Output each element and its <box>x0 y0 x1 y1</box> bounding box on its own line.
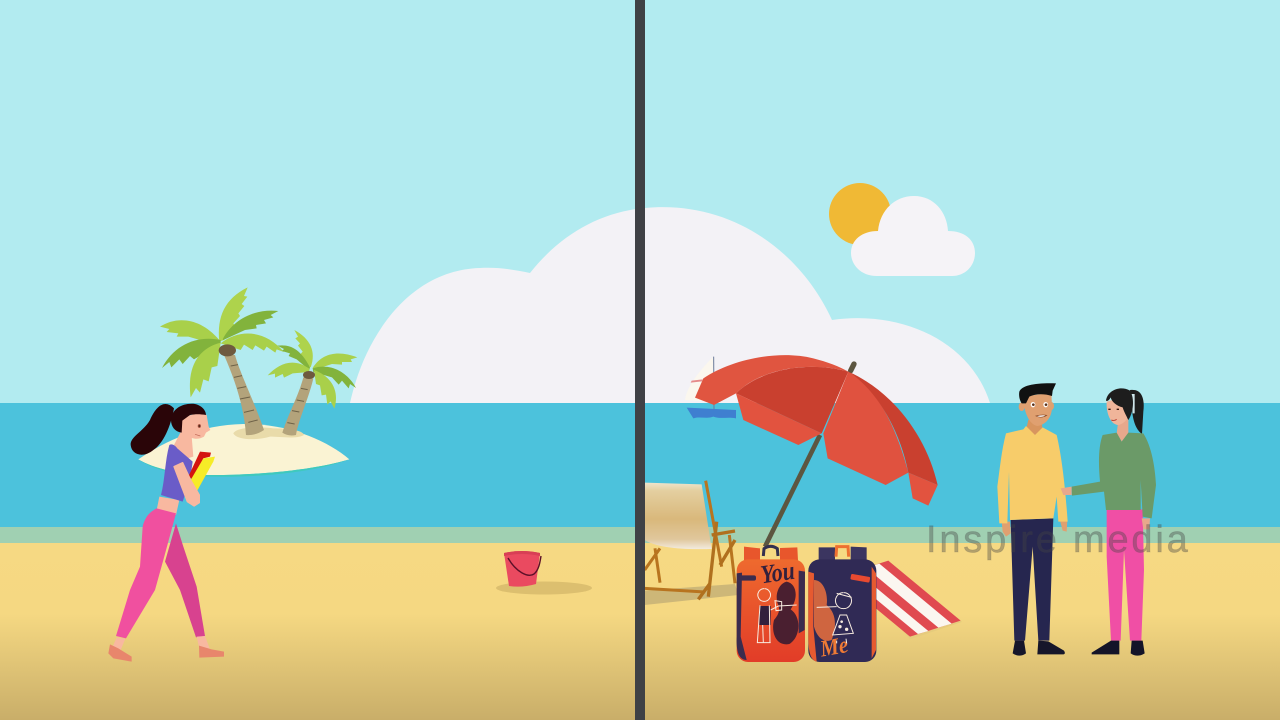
eyes <box>1031 402 1048 407</box>
sweater <box>1072 433 1156 518</box>
face <box>180 414 210 439</box>
chair frame back <box>645 481 735 592</box>
straps <box>819 547 867 561</box>
face <box>1023 393 1052 426</box>
handle <box>763 546 778 556</box>
canopy left panel <box>695 355 848 405</box>
backpack you <box>737 546 805 662</box>
hands <box>1061 487 1150 529</box>
eyes and mouth <box>1108 407 1119 411</box>
beach chair <box>645 481 738 605</box>
shirt <box>997 426 1068 523</box>
canopy right dark panel <box>848 372 938 485</box>
sail stripes <box>691 379 703 383</box>
large background cloud <box>350 207 990 403</box>
tag <box>850 574 870 583</box>
island water edge <box>138 459 349 477</box>
sea <box>0 403 1280 527</box>
tree shadow <box>233 427 304 439</box>
woman walking with book <box>108 404 224 662</box>
handle <box>836 547 849 557</box>
mast <box>712 357 715 409</box>
shoes <box>1013 641 1065 656</box>
ears <box>1019 402 1054 411</box>
sky <box>0 0 1280 403</box>
bucket body <box>504 551 540 587</box>
white stripe upper <box>866 564 952 628</box>
shallow water <box>0 527 1280 543</box>
hair highlight <box>1131 394 1135 413</box>
neck <box>174 430 193 458</box>
bucket rim <box>504 551 540 556</box>
canopy inner dark panel <box>736 367 848 433</box>
chair shadow <box>645 584 738 605</box>
side panels <box>737 571 805 660</box>
hands <box>1002 521 1067 537</box>
back leg <box>165 523 205 637</box>
sail <box>685 357 714 402</box>
watermark: Inspire media <box>926 519 1191 561</box>
leggings <box>116 508 176 638</box>
trousers <box>1011 518 1053 641</box>
palm trunk small <box>282 377 313 435</box>
bucket <box>496 551 592 594</box>
palm trunk large <box>224 355 264 435</box>
umbrella tip <box>851 364 854 371</box>
straps <box>744 547 798 561</box>
swirl <box>773 582 798 644</box>
white stripe lower <box>846 571 928 634</box>
center divider <box>635 0 645 720</box>
neck <box>1026 420 1043 437</box>
island sand <box>138 424 349 475</box>
face <box>1107 400 1131 425</box>
label you: You <box>759 556 797 589</box>
book <box>188 452 215 492</box>
canopy lower left panel <box>736 393 822 445</box>
hair <box>1019 383 1056 403</box>
body <box>737 559 805 662</box>
hair <box>1106 388 1133 420</box>
towel base <box>838 561 961 637</box>
body <box>808 559 876 662</box>
hull <box>687 408 736 418</box>
chair frame front <box>698 522 735 599</box>
island with palm trees <box>138 287 357 477</box>
hair <box>171 404 206 433</box>
palm leaves small <box>268 330 357 409</box>
label me: Me <box>817 632 850 663</box>
ponytail <box>1130 390 1144 434</box>
trousers <box>1107 509 1144 641</box>
arm <box>174 463 199 506</box>
canopy right panel <box>823 372 908 485</box>
girl line drawing <box>817 593 853 643</box>
boy line drawing <box>757 589 797 643</box>
eye and mouth <box>195 424 201 436</box>
man in yellow shirt <box>997 383 1068 656</box>
ponytail <box>131 404 174 455</box>
midriff <box>157 497 179 515</box>
striped towel <box>838 561 962 639</box>
umbrella pole <box>765 435 820 547</box>
feet <box>108 636 224 662</box>
towel shadow <box>876 598 962 639</box>
canopy right tip <box>908 473 938 506</box>
backpack me <box>808 547 876 663</box>
woman in green sweater <box>1061 388 1156 656</box>
palm leaves large <box>160 287 284 397</box>
chair canvas <box>645 483 712 549</box>
bucket shadow <box>496 582 592 594</box>
pocket tag <box>740 575 756 581</box>
sun <box>829 183 891 245</box>
top <box>161 444 193 502</box>
shoes <box>1092 641 1145 656</box>
bucket handle <box>508 556 541 575</box>
mouth <box>1036 415 1047 417</box>
sand <box>0 543 1280 720</box>
orange patch <box>814 580 835 641</box>
neck <box>1117 418 1128 442</box>
sailboat <box>685 357 736 418</box>
beach umbrella <box>695 355 938 547</box>
small cloud <box>851 196 975 276</box>
orange side <box>808 567 876 662</box>
